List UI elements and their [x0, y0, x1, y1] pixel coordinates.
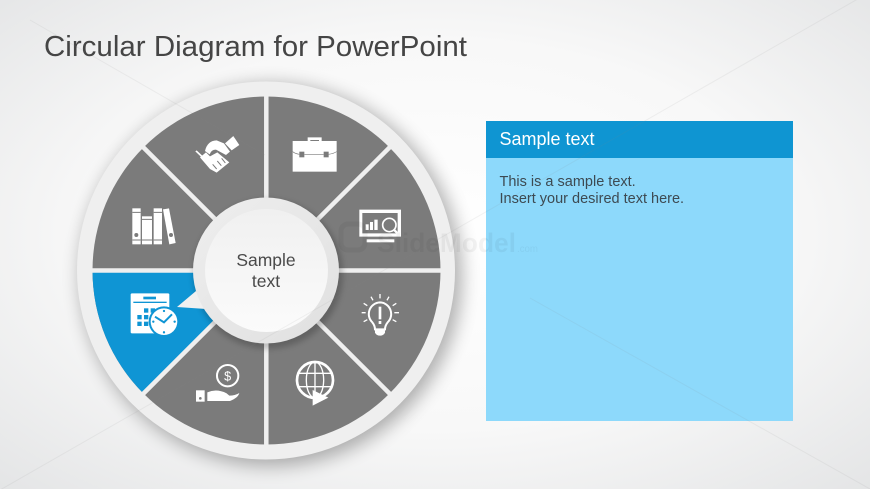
icon: globe with arrow [297, 362, 333, 406]
center hub ring [193, 198, 339, 344]
center label: Sample [236, 250, 296, 270]
center hub disc [205, 209, 328, 332]
icon: light bulb [362, 294, 399, 336]
panel heading: Sample text [500, 129, 595, 149]
segment dividers [88, 90, 445, 451]
panel body text: Insert your desired text here. [500, 191, 684, 207]
center hub shadow [193, 199, 343, 349]
center label: text [252, 271, 280, 291]
icon: books [132, 208, 176, 244]
panel body text: This is a sample text. [500, 174, 636, 190]
title: Circular Diagram for PowerPoint [44, 31, 467, 63]
watermark: SlideModel [377, 228, 516, 258]
icon: coin in hand [196, 365, 239, 402]
watermark [341, 224, 538, 258]
icon: presentation screen [359, 210, 401, 242]
icon: briefcase [293, 137, 337, 172]
icon: calendar with clock [131, 293, 179, 337]
panel header [486, 121, 793, 158]
callout pointer [177, 291, 206, 309]
watermark: .com [517, 244, 538, 255]
gray segments [92, 96, 440, 444]
outer ring [77, 82, 455, 460]
segment: active calendar [92, 270, 266, 394]
circular diagram [77, 82, 462, 466]
panel: sample text [486, 121, 793, 421]
icon: coin in hand: $ [224, 369, 231, 383]
icon: handshake [195, 136, 239, 173]
